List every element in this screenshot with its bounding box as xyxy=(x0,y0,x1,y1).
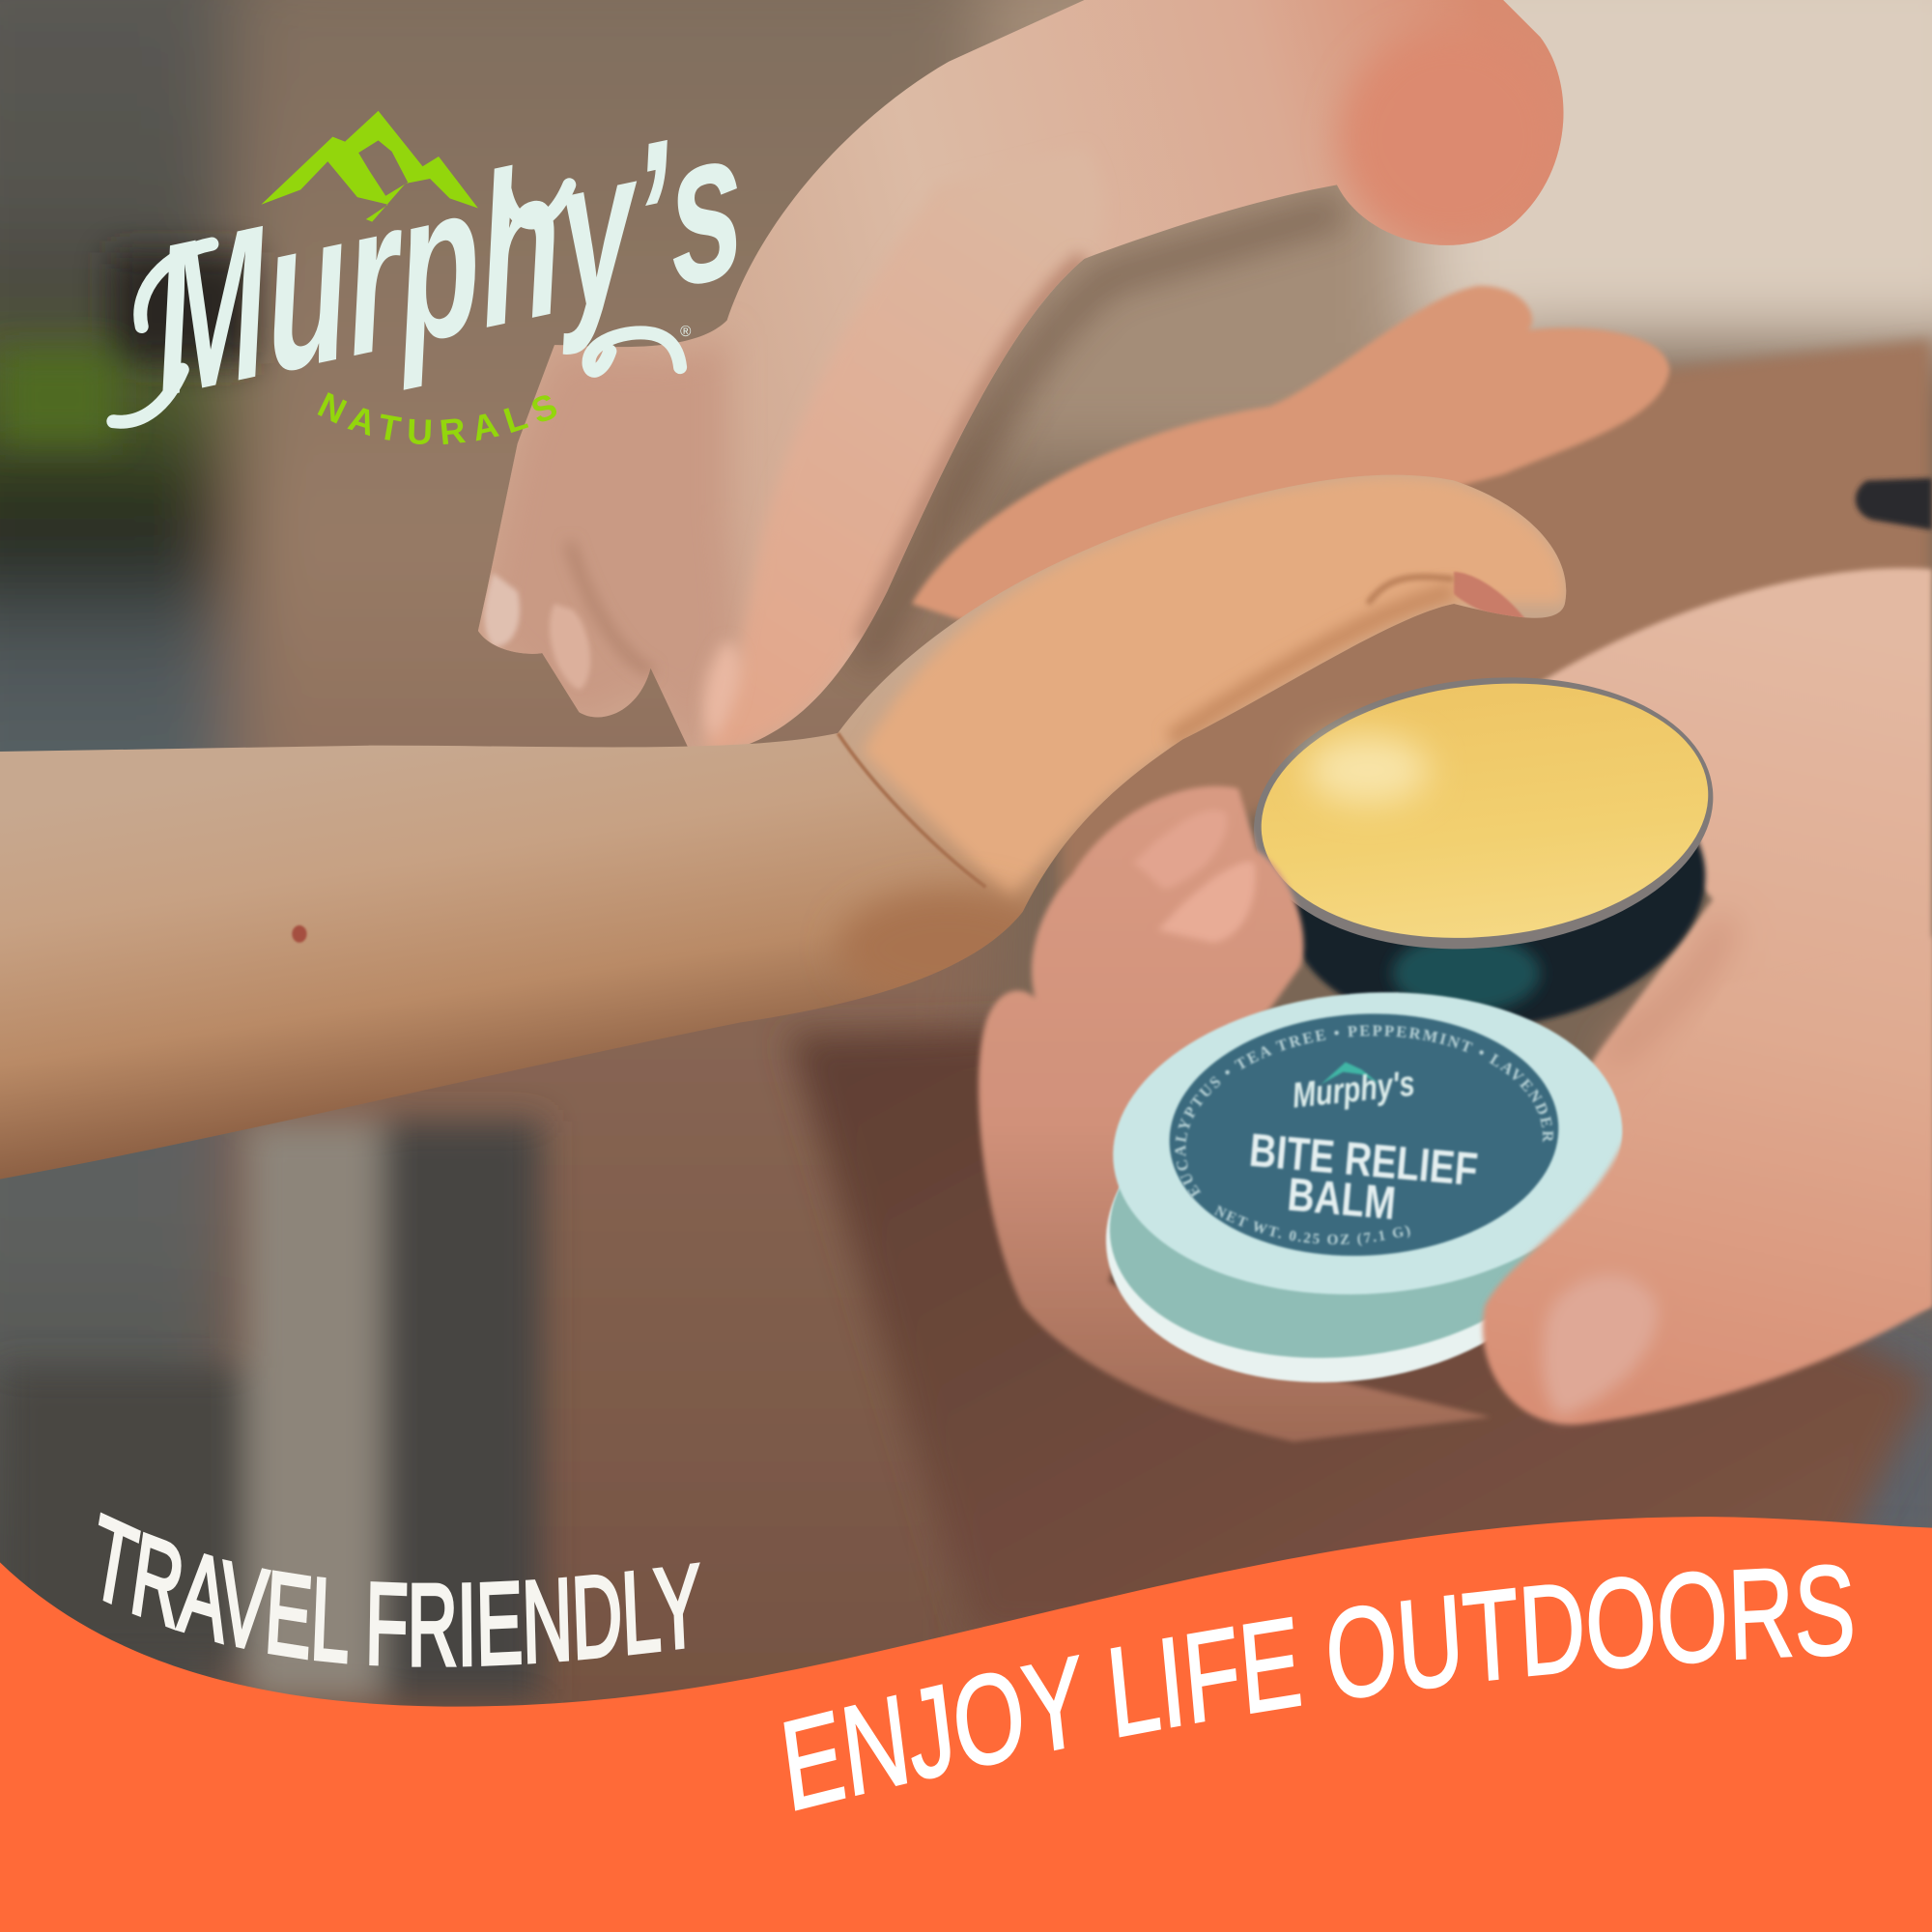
headline: Enjoy Life Outdoors: ENJOY LIFE OUTDOORS xyxy=(783,1565,1853,1811)
child's arm and hand xyxy=(0,456,1602,1195)
Naturals: NATURALS xyxy=(317,392,556,444)
tagline: Travel Friendly: TRAVEL FRIENDLY xyxy=(99,1513,700,1667)
registered mark: ® xyxy=(680,324,692,340)
bug bite mark xyxy=(292,925,307,943)
supporting hand fingers xyxy=(912,286,1669,629)
label text: Murphy's xyxy=(1291,1064,1417,1117)
label text: EUCALYPTUS • TEA TREE • PEPPERMINT • LAVENDER xyxy=(1174,1024,1555,1198)
wordmark: Murphy’s xyxy=(147,79,751,442)
left fingers holding the tin xyxy=(979,786,1491,1441)
wordmark swashes xyxy=(113,185,680,422)
closed lid with Bite Relief Balm label xyxy=(1105,991,1624,1383)
Murphy's Naturals logo xyxy=(106,79,751,444)
mountain icon xyxy=(261,111,478,222)
hand shadow on background xyxy=(863,210,1343,666)
orange wave banner xyxy=(0,1517,1932,1932)
right thumb in front of the lid xyxy=(1483,936,1932,1425)
pinching hand xyxy=(469,0,1602,777)
label logo mountain xyxy=(1321,1062,1380,1084)
label text: BITE RELIEF xyxy=(1247,1124,1480,1196)
label text: BALM xyxy=(1286,1169,1398,1230)
right hand palm xyxy=(1479,568,1932,1380)
man's forearm xyxy=(1060,339,1932,912)
open tin of yellow balm xyxy=(1240,656,1726,1054)
label text: NET WT. 0.25 OZ (7.1 G) xyxy=(1213,1204,1411,1247)
dark strap at right edge xyxy=(1856,478,1932,529)
